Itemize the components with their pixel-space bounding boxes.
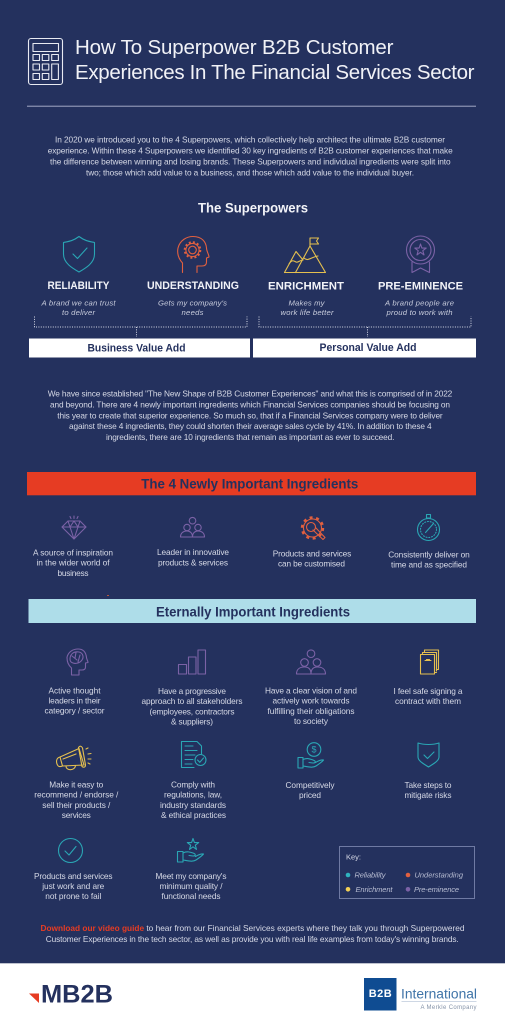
second text block	[48, 389, 453, 442]
text: newly important ingredients: Leader in innovative	[157, 547, 229, 557]
superpower descriptions: Makes my	[288, 298, 326, 308]
text: eternal row 1: Have a progressive	[158, 686, 226, 696]
text: eternal row 2	[34, 780, 452, 820]
superpower descriptions: A brand people are	[384, 298, 454, 308]
text: eternal row 3: Meet my company's	[156, 871, 226, 881]
text: newly important ingredients: products & services	[158, 557, 228, 567]
superpower labels	[48, 280, 463, 292]
superpower descriptions: to deliver	[62, 308, 95, 317]
superpower descriptions: proud to work with	[386, 308, 452, 317]
superpower labels: UNDERSTANDING	[147, 280, 239, 292]
text: newly important ingredients: A source of inspiration	[33, 548, 113, 558]
text: eternal row 1: Have a clear vision of and	[265, 686, 357, 696]
call to action text	[40, 923, 465, 944]
text: eternal row 2: Competitively	[286, 780, 335, 790]
heading: The Superpowers: The Superpowers	[198, 200, 308, 216]
bracket: business	[34, 316, 247, 337]
logo: B2B International	[364, 978, 477, 1011]
intro text block	[48, 134, 453, 178]
superpower descriptions	[40, 298, 454, 317]
text: eternal row 3: Products and services	[34, 871, 113, 881]
banner: Eternally Important Ingredients: Eternally Important Ingredients	[156, 604, 350, 620]
second text block: against these 4 ingredients, they could shorten their average sales cycle by 41%. In addition to these 4	[69, 421, 432, 431]
second text block: We have since established "The New Shape of B2B Customer Experiences" and what this is comprised of in 2022	[48, 389, 453, 399]
second text block: this year to create that superior experience. So much so, that if a Financial Services company were to deliver	[57, 410, 443, 420]
text: eternal row 2: priced	[299, 790, 321, 800]
superpower descriptions: Gets my company's	[158, 298, 227, 308]
icon: megaphone	[57, 746, 91, 770]
text: eternal row 1: I feel safe signing a	[394, 686, 463, 696]
legend key	[340, 846, 474, 898]
superpower descriptions: needs	[182, 308, 204, 317]
banner: Eternally Important Ingredients	[28, 599, 476, 623]
title: Experiences In The Financial Services Sector	[75, 61, 475, 84]
text: eternal row 1: & suppliers)	[171, 716, 213, 726]
text: eternal row 2: sell their products /	[42, 800, 111, 810]
icon: contract documents	[420, 650, 438, 674]
text: eternal row 1: contract with them	[395, 696, 461, 706]
title	[75, 36, 475, 84]
text: newly important ingredients: time and as specified	[391, 560, 467, 570]
title: How To Superpower B2B Customer	[75, 36, 394, 59]
legend key: Understanding	[414, 870, 464, 880]
icon: hand with star	[178, 838, 204, 862]
intro text block: the difference between winning and losing brands. These Superpowers and individual ingredients were split into	[50, 156, 451, 166]
superpower labels: ENRICHMENT	[268, 280, 344, 292]
superpower descriptions: work life better	[280, 308, 334, 317]
text: newly important ingredients: Consistently deliver on	[388, 550, 470, 560]
legend key: Reliability	[354, 870, 387, 880]
icon: stopwatch	[418, 514, 440, 540]
text: eternal row 2: mitigate risks	[404, 790, 452, 800]
box: Business Value Add: Business Value Add	[88, 342, 186, 354]
icon: hand with dollar coin: $	[311, 745, 317, 755]
second text block: ingredients, there are 10 ingredients that remain as important as ever to succeed.	[106, 432, 394, 442]
box: Personal Value Add: Personal Value Add	[320, 342, 416, 354]
text: eternal row 1: to society	[294, 716, 329, 726]
icon: people	[180, 517, 204, 537]
text: newly important ingredients: business	[58, 568, 88, 578]
text: newly important ingredients: can be customised	[278, 559, 345, 569]
intro text block: two; those which add value to a business, and those which add value to the individual buyer.	[86, 168, 414, 178]
logo: B2B International: B2B	[369, 988, 392, 1000]
intro text block: In 2020 we introduced you to the 4 Superpowers, which collectively help architect the ultimate B2B customer	[55, 134, 445, 144]
logo: B2B International: A Merkle Company	[420, 1005, 476, 1011]
text: eternal row 1: (employees, contractors	[150, 706, 234, 716]
icon: diamond	[62, 516, 86, 539]
icon: group of people	[296, 650, 326, 674]
logo: B2B International: International	[401, 986, 477, 1002]
icon: understanding head with gear	[178, 236, 209, 272]
icon: bar chart	[178, 650, 206, 674]
legend key: Key:	[346, 852, 361, 862]
text: eternal row 3: minimum quality /	[160, 881, 223, 891]
text: eternal row 3: functional needs	[162, 891, 220, 901]
superpower descriptions: A brand we can trust	[40, 298, 116, 308]
intro text block: experience. Within these 4 Superpowers we identified 30 key ingredients of B2B customer experiences that make	[48, 146, 453, 156]
icon: calculator	[28, 38, 62, 84]
superpower labels: PRE-EMINENCE	[378, 280, 463, 292]
legend key: Enrichment	[356, 885, 393, 894]
box: Personal Value Add	[253, 338, 476, 358]
banner: The 4 Newly Important Ingredients: The 4 Newly Important Ingredients	[141, 476, 359, 492]
box: Business Value Add	[29, 338, 250, 358]
text: eternal row 1: approach to all stakeholders	[142, 696, 242, 706]
call to action text: Download our video guide to hear from our Financial Services experts where they talk you through Superpowered	[40, 923, 465, 933]
text: eternal row 2: Make it easy to	[49, 780, 104, 790]
text: newly important ingredients: Products and services	[273, 548, 351, 558]
text: eternal row 3	[34, 871, 226, 901]
icon: hand with dollar coin	[298, 743, 324, 768]
text: eternal row 1	[44, 685, 463, 726]
second text block: and beyond. There are 4 newly important ingredients which Financial Services companies should be focusing on	[50, 400, 450, 410]
text: eternal row 1: fulfilling their obligations	[268, 706, 354, 716]
legend key: Pre-eminence	[414, 885, 459, 894]
footer band	[0, 963, 505, 1024]
icon: enrichment mountain with flag	[284, 238, 326, 272]
text: eternal row 2: & ethical practices	[161, 810, 226, 820]
text: eternal row 1: actively work towards	[272, 696, 350, 706]
text: eternal row 1: leaders in their	[48, 696, 101, 706]
icon: reliability shield	[64, 236, 94, 272]
text: eternal row 2: regulations, law,	[164, 790, 222, 800]
text: eternal row 1: Active thought	[48, 685, 101, 695]
bracket: personal	[259, 316, 471, 337]
text: eternal row 2: industry standards	[160, 800, 226, 810]
text: eternal row 2: services	[62, 810, 91, 820]
superpower labels: RELIABILITY	[48, 280, 110, 292]
icon: gear and wrench	[302, 518, 325, 540]
icon: mitigate risks shield	[418, 743, 439, 767]
call to action text: Customer Experiences in the tech sector, as well as provide you with real life examples from today's winning brands.	[46, 934, 459, 944]
icon: check circle	[58, 838, 82, 862]
text: eternal row 1: category / sector	[44, 706, 105, 716]
text: eternal row 2: Comply with	[171, 780, 215, 790]
logo: MB2B: MB2B	[41, 980, 113, 1008]
text: eternal row 2: Take steps to	[404, 780, 452, 790]
text: eternal row 3: not prone to fail	[45, 891, 101, 901]
text: newly important ingredients	[33, 547, 470, 578]
icon: pre-eminence badge	[406, 236, 434, 272]
icon: compliance document	[182, 742, 206, 768]
text: eternal row 3: just work and are	[41, 881, 105, 891]
text: newly important ingredients: in the wider world of	[36, 558, 110, 568]
text: eternal row 2: recommend / endorse /	[34, 790, 119, 800]
banner: The 4 Newly Important Ingredients	[27, 472, 476, 495]
icon: brain head	[67, 649, 88, 675]
